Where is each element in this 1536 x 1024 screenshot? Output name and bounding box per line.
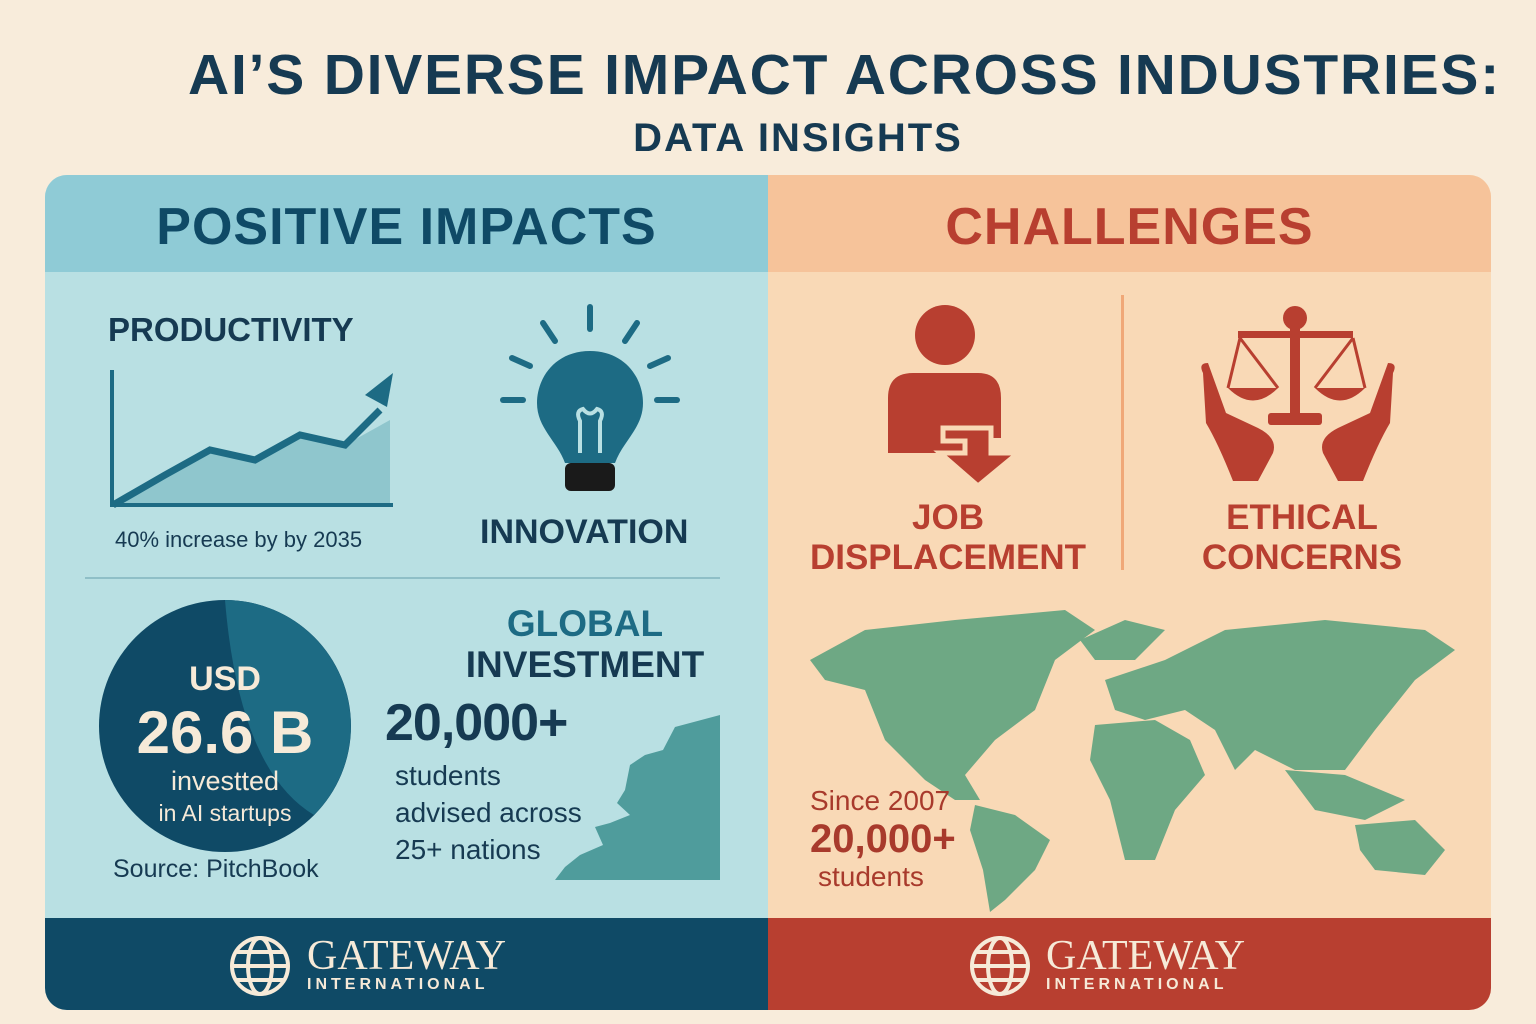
map: world xyxy=(810,610,1455,912)
footer logo left xyxy=(45,918,768,1010)
panel: challenges xyxy=(768,175,1491,1010)
text: students advised xyxy=(395,760,582,865)
footer logo right: GATEWAY xyxy=(1046,933,1245,979)
footer logo right: INTERNATIONAL xyxy=(1046,976,1227,993)
pie chart: investment: investted xyxy=(171,766,279,796)
label: ethical concerns: ETHICAL xyxy=(1226,498,1378,537)
text: since 2007: students xyxy=(818,861,924,892)
footer logo left: INTERNATIONAL xyxy=(307,976,488,993)
heading: productivity: PRODUCTIVITY xyxy=(108,311,354,348)
pie chart: investment: in AI startups xyxy=(159,800,291,826)
heading: innovation: INNOVATION xyxy=(480,513,688,551)
pie label xyxy=(137,660,313,826)
icon: scales in hands xyxy=(1201,306,1395,481)
label: ethical concerns xyxy=(1202,498,1402,577)
header: positive impacts xyxy=(45,175,768,272)
pie chart: investment: USD xyxy=(189,660,261,698)
caption: 40% increase by by 2035 xyxy=(115,527,362,552)
label: job displacement: DISPLACEMENT xyxy=(810,538,1086,577)
text: since 2007 xyxy=(810,785,956,892)
footer logo left: GATEWAY xyxy=(307,933,506,979)
footer logo right xyxy=(768,918,1491,1010)
label: ethical concerns: CONCERNS xyxy=(1202,538,1402,577)
label: job displacement: JOB xyxy=(912,498,984,537)
text: since 2007: Since 2007 xyxy=(810,785,950,816)
heading: global investment: INVESTMENT xyxy=(466,644,704,685)
map: europe xyxy=(555,715,720,880)
heading: global investment xyxy=(466,603,704,685)
header: positive impacts: POSITIVE IMPACTS xyxy=(156,198,657,256)
text: students advised: students xyxy=(395,760,501,791)
title: AI’S DIVERSE IMPACT ACROSS INDUSTRIES: xyxy=(188,43,1501,107)
subtitle: DATA INSIGHTS xyxy=(633,116,963,160)
icon: lightbulb xyxy=(500,304,680,491)
source: Source: PitchBook xyxy=(113,855,319,883)
panel: positive impacts xyxy=(45,175,768,1010)
pie chart: investment xyxy=(99,600,351,852)
text: students advised: 25+ nations xyxy=(395,834,541,865)
label: job displacement xyxy=(810,498,1086,577)
header: challenges xyxy=(768,175,1491,272)
stat: students: 20,000+ xyxy=(385,694,567,752)
text: since 2007: 20,000+ xyxy=(810,817,956,861)
pie chart: investment: 26.6 B xyxy=(137,699,313,766)
heading: global investment: GLOBAL xyxy=(507,603,663,644)
header: challenges: CHALLENGES xyxy=(945,198,1314,256)
icon: person displaced xyxy=(888,305,1011,483)
text: students advised: advised across xyxy=(395,797,582,828)
line chart xyxy=(110,370,393,508)
